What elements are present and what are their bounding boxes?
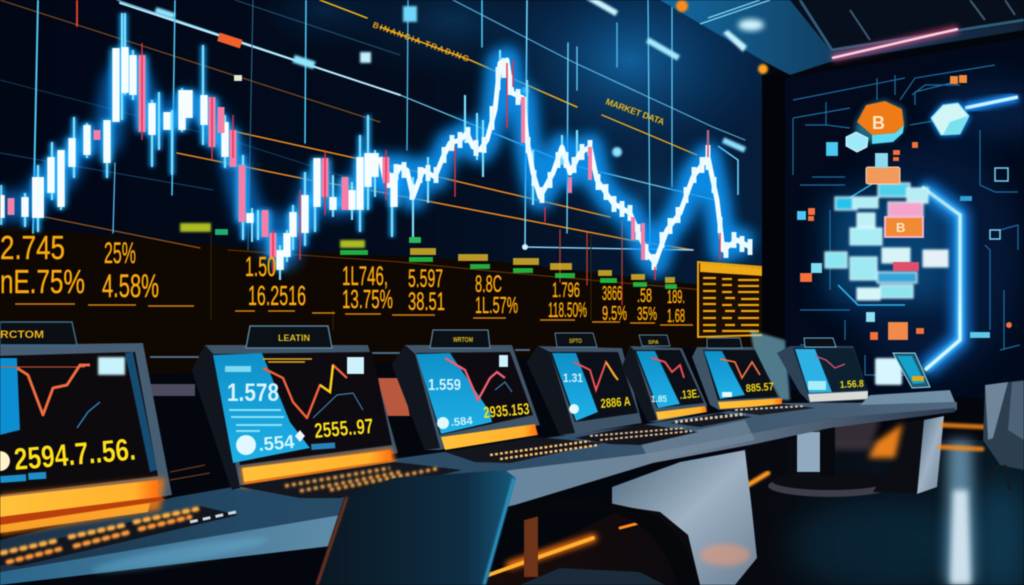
price readouts on wall: 189. [667, 287, 685, 307]
price readouts on wall: 3866 [602, 283, 622, 305]
price readouts on wall: 8.8C [475, 271, 502, 298]
monitor 4: 2886 A [600, 393, 632, 411]
monitor 2 [192, 345, 398, 490]
candlestick chart: wicks [1, 13, 708, 280]
monitor 2: 1.578 [227, 379, 279, 407]
icon: glowing cube [930, 102, 970, 136]
monitor 2: 2555..97 [313, 415, 374, 443]
candlestick chart: pink bodies [11, 43, 720, 280]
monitor 6 [692, 347, 782, 410]
circuit traces [793, 65, 1020, 375]
monitor 5: 1.85 [651, 394, 667, 404]
monitor 1 [0, 343, 172, 535]
monitor 2: .554 [258, 432, 296, 456]
monitor 3 label plate [430, 330, 490, 348]
monitor 1: 2594.7..56. [13, 431, 137, 477]
monitor 3: 2935.153 [483, 401, 530, 422]
monitor 6 label plate [707, 338, 742, 348]
monitor 8 and light block [860, 353, 955, 405]
keyboard 3 [445, 437, 603, 463]
price readouts on wall: .58 [637, 286, 652, 307]
monitor 4 [527, 346, 642, 435]
desk: silver pedestal [500, 450, 757, 585]
price readouts on wall [0, 229, 693, 326]
icon: bitcoin token [846, 100, 905, 152]
price readouts on wall: 13.75% [342, 284, 393, 314]
monitor 3 label plate: WRTOM [453, 337, 473, 344]
price readouts on wall: 1.68 [667, 306, 685, 326]
candlesticks glow [0, 13, 750, 270]
right table legs [768, 416, 944, 497]
keyboard 6 [720, 404, 815, 415]
heading strips on wall: BINANCIA TRADING [371, 19, 471, 64]
monitor 5 label plate: SPA [648, 340, 659, 346]
monitor 7 [777, 346, 868, 403]
price readouts on wall: 118.50% [548, 299, 587, 322]
blockchain block cluster [825, 153, 950, 322]
monitor 2 label plate: LEATIN [278, 333, 310, 343]
perspective grid lines [0, 0, 760, 330]
monitor 5: .13E. [679, 386, 700, 402]
monitor 4 label plate [555, 333, 597, 347]
price readouts on wall: 1L746, [342, 261, 388, 291]
monitor 7 label plate [804, 338, 836, 347]
keyboard 2 [236, 462, 462, 498]
desk legs: left post [524, 505, 538, 577]
icon: bitcoin token: B [872, 113, 885, 133]
monitor 7: 1.56.8 [840, 379, 864, 391]
back ledge behind desks [150, 330, 790, 480]
price readouts on wall: 16.2516 [248, 280, 306, 311]
foreground chair [315, 470, 516, 585]
neon beam [965, 97, 1018, 108]
price readouts on wall: 38.51 [408, 288, 445, 316]
candlestick chart: white bodies [1, 47, 750, 270]
yellow data panel [698, 262, 763, 337]
price readouts on wall: nE.75% [0, 263, 85, 300]
keyboard 5 [670, 413, 752, 427]
monitor 1 label plate: RCTOM [0, 329, 44, 341]
monitor 4 label plate: SPTO [569, 339, 582, 345]
price readouts on wall: 9.5% [602, 303, 627, 325]
monitor 2 label plate [246, 326, 332, 348]
monitor 6: 885.57 [745, 381, 774, 395]
price readouts on wall: 35% [637, 304, 657, 324]
dark column between walls [762, 75, 790, 345]
neon strip: ceiling light [832, 29, 958, 58]
monitor 1 label plate [0, 322, 77, 345]
heading strips on wall [180, 19, 677, 289]
price readouts on wall: 2.745 [0, 229, 65, 266]
monitor 3 [392, 345, 540, 450]
blockchain block cluster: B [896, 220, 905, 235]
monitor 5 label plate [639, 335, 670, 346]
panel: blockchain wall display [785, 38, 1024, 400]
price readouts on wall: 1.796 [552, 279, 580, 302]
heading strips on wall: MARKET DATA [604, 96, 666, 127]
neon hexagon frame [838, 178, 960, 370]
monitor 3: 1.559 [428, 377, 461, 394]
small glowing labels on the wall lines [155, 0, 746, 250]
monitor 4: 1.31 [563, 371, 583, 385]
floor [470, 420, 1024, 585]
desk: long work surface [0, 402, 957, 585]
price readouts on wall: 4.58% [102, 268, 159, 304]
price readouts on wall: 1L.57% [475, 292, 518, 318]
price readouts on wall: 1.50 [245, 251, 276, 282]
scattered nodes [797, 75, 1012, 340]
ceiling [660, 0, 1024, 75]
keyboard 1 [0, 506, 238, 566]
main trading wall display [0, 0, 780, 382]
right chair [983, 380, 1024, 490]
price readouts on wall: 5.597 [408, 265, 443, 293]
floor neon strips [480, 425, 985, 578]
monitor 3: .584 [450, 415, 474, 429]
monitor 5 [622, 346, 707, 422]
keyboard 4 [575, 424, 698, 445]
price readouts on wall: 25% [104, 237, 136, 270]
